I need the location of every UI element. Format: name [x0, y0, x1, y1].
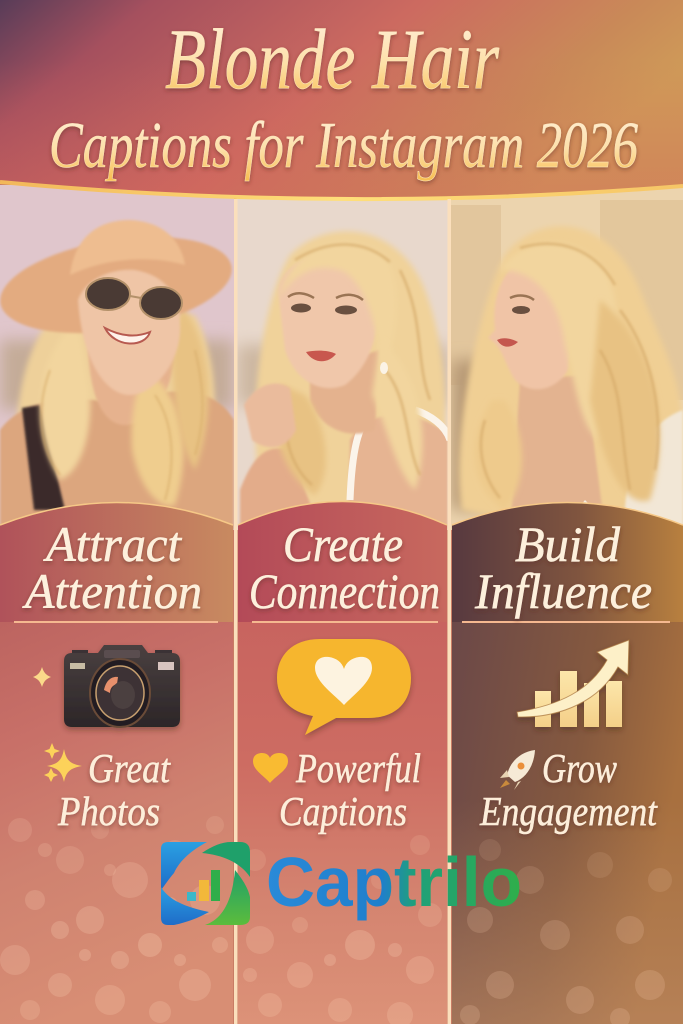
text: Powerful Captions: Captions	[279, 788, 407, 834]
icon: rocket emoji	[500, 750, 535, 790]
photo: woman in profile	[451, 185, 683, 530]
logo wordmark: Captrilo	[266, 843, 522, 921]
icon: camera	[64, 645, 180, 727]
heading: Create Connection	[249, 516, 440, 619]
icon: sparkles emoji	[44, 743, 82, 782]
panel: header banner	[0, 0, 683, 199]
text: Powerful Captions	[279, 745, 421, 834]
heading: Attract Attention: Attract	[43, 516, 182, 572]
text: Grow Engagement	[479, 745, 658, 834]
heading: Create Connection: Create	[283, 516, 403, 572]
text: Grow Engagement: Grow	[542, 745, 618, 791]
title: Blonde Hair	[165, 11, 499, 107]
heading: Build Influence: Build	[515, 516, 621, 572]
photo: woman with wavy hair	[237, 185, 450, 530]
photo: woman in sun hat	[0, 185, 239, 530]
heading: Build Influence	[474, 516, 652, 619]
text: Great Photos: Photos	[57, 788, 160, 834]
panel: column three, Build Influence	[452, 502, 683, 1024]
text: Grow Engagement: Engagement	[479, 788, 658, 834]
heading: Attract Attention	[22, 516, 202, 619]
icon: speech bubble with heart	[277, 639, 411, 735]
icon: growth chart with arrow	[517, 640, 629, 727]
icon: heart emoji	[253, 753, 288, 783]
icon: sparkle	[33, 667, 51, 687]
panel: column two, Create Connection	[238, 502, 447, 1024]
text: Powerful Captions: Powerful	[295, 745, 421, 791]
heading: Build Influence: Influence	[474, 563, 652, 619]
title	[49, 11, 638, 182]
panel: column one, Attract Attention	[0, 502, 233, 1024]
heading: Attract Attention: Attention	[22, 563, 202, 619]
logo mark	[161, 842, 250, 925]
logo: Captrilo	[161, 842, 522, 925]
heading: Create Connection: Connection	[249, 563, 440, 619]
text: Great Photos: Great	[88, 745, 171, 791]
text: Great Photos	[57, 745, 171, 834]
